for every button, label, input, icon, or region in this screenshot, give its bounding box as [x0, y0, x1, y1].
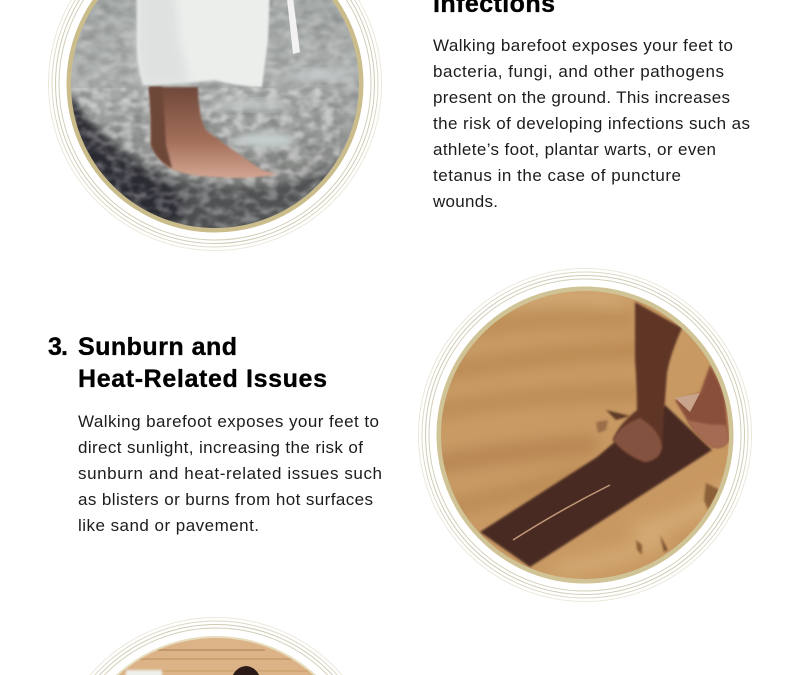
- decorative rings around photo 1: [48, 0, 382, 250]
- photo: wooden ceiling and person's hair: [119, 638, 313, 675]
- paragraph: sunburn: as blisters or burns from hot surfaces: [78, 490, 373, 509]
- heading: sunburn and heat-related issues: Sunburn and: [78, 333, 237, 361]
- legs and feet: [149, 87, 278, 178]
- panel: sunburn text: [48, 333, 382, 535]
- panel: sunburn photo: [418, 268, 752, 602]
- paragraph: infections: athlete’s foot, plantar warts, or even: [433, 140, 716, 159]
- paragraph: infections: tetanus in the case of puncture: [433, 166, 681, 185]
- paragraph: sunburn: direct sunlight, increasing the risk of: [78, 438, 363, 457]
- cloth: [137, 0, 270, 87]
- heading: sunburn and heat-related issues: [78, 333, 327, 393]
- paragraph: sunburn: Walking barefoot exposes your feet to: [78, 412, 379, 431]
- photo: bare feet on wet gravel: [71, 0, 359, 228]
- decorative rings around photo 3: [50, 618, 382, 675]
- heading: sunburn and heat-related issues: Heat-Related Issues: [78, 365, 327, 393]
- paragraph: infections: the risk of developing infections such as: [433, 114, 750, 133]
- legs and feet: [613, 302, 682, 462]
- shadow: [480, 405, 712, 567]
- panel: infections photo: [48, 0, 382, 250]
- paragraph: sunburn: like sand or pavement.: [78, 516, 259, 535]
- paragraph: infections: Walking barefoot exposes your feet to: [433, 36, 733, 55]
- panel: infections text: [432, 0, 750, 211]
- paragraph: infections: wounds.: [432, 192, 498, 211]
- photo: feet on sand with long shadow: [441, 291, 729, 579]
- number 3: 3.: [48, 333, 68, 361]
- footprint marks: [596, 410, 720, 555]
- decorative rings around photo 2: [418, 268, 752, 602]
- panel: third photo (cropped at page bottom): [90, 617, 342, 675]
- paragraph: infections: present on the ground. This increases: [433, 88, 730, 107]
- paragraph: sunburn: sunburn and heat-related issues such: [78, 464, 382, 483]
- paragraph: sunburn: [78, 412, 382, 535]
- paragraph: infections: [432, 36, 750, 211]
- paragraph: infections: bacteria, fungi, and other pathogens: [433, 62, 724, 81]
